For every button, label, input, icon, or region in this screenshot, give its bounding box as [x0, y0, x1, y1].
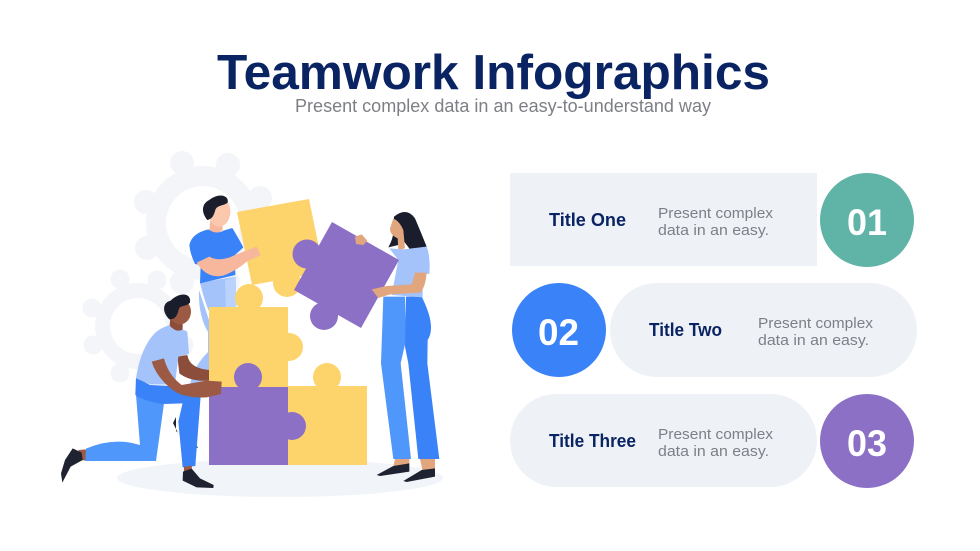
- puzzle piece: purple bottom: [209, 363, 306, 465]
- description: Present complex: [658, 426, 774, 443]
- standing man's lower leg: [190, 290, 209, 386]
- neck and head: [169, 315, 183, 332]
- description: Present complex: [658, 205, 774, 222]
- hips: [135, 377, 201, 404]
- back foot of standing man: [173, 417, 198, 448]
- panel 3: Title Three: [510, 394, 817, 487]
- description: data in an easy.: [658, 443, 769, 460]
- description: data in an easy.: [658, 222, 769, 239]
- hair back: [388, 212, 427, 249]
- small background gear: [82, 270, 194, 382]
- puzzle piece: yellow middle: [209, 284, 303, 387]
- description: [658, 205, 774, 239]
- person: standing man in blue shirt: [189, 196, 243, 313]
- front leg: [178, 396, 201, 467]
- badge 03: 03: [847, 423, 887, 464]
- badge 01: 01: [847, 202, 887, 243]
- hair: [164, 295, 190, 319]
- neck and face: [390, 218, 405, 250]
- badge 01: [820, 173, 914, 267]
- front shoe: [183, 469, 214, 488]
- front ankle: [184, 466, 192, 473]
- shirt: [136, 325, 189, 385]
- trousers: [377, 297, 439, 482]
- back arm: [177, 355, 209, 381]
- puzzle piece: tilted purple: [292, 222, 399, 330]
- ground shadow: [117, 459, 443, 497]
- rear leg: [85, 395, 164, 461]
- kneeling man's front arm: [152, 358, 222, 397]
- shoes: [377, 463, 409, 476]
- panel 1: Title One: [510, 173, 817, 266]
- woman's arm and hands: [355, 234, 427, 298]
- illustration: teamwork puzzle: [61, 151, 443, 497]
- puzzle piece: yellow bottom right: [288, 363, 367, 465]
- title: Teamwork Infographics: [217, 46, 770, 100]
- description: Present complex: [758, 315, 874, 332]
- panel 2: Title Two: [610, 283, 917, 377]
- standing man's arm: [197, 247, 261, 276]
- badge 03: [820, 394, 914, 488]
- heading: Title Two: [649, 320, 722, 340]
- heading: Title Three: [549, 431, 636, 451]
- person: kneeling man: [61, 295, 214, 488]
- badge 02: [512, 283, 606, 377]
- hair: [203, 196, 228, 220]
- description: data in an easy.: [758, 332, 869, 349]
- subtitle: Present complex data in an easy-to-understand way: [295, 95, 712, 116]
- ankles: [393, 459, 409, 467]
- person: standing woman: [377, 212, 439, 482]
- rear foot skin: [78, 449, 87, 461]
- shirt: [189, 228, 243, 283]
- trousers: [200, 277, 237, 313]
- puzzle piece: tilted yellow: [237, 199, 324, 297]
- large background gear: [134, 151, 273, 294]
- badge 02: 02: [538, 312, 579, 353]
- neck and face: [209, 217, 223, 233]
- heading: Title One: [549, 210, 626, 230]
- rear shoe: [61, 448, 83, 483]
- description: [758, 315, 874, 349]
- shirt: [389, 247, 430, 297]
- description: [658, 426, 774, 460]
